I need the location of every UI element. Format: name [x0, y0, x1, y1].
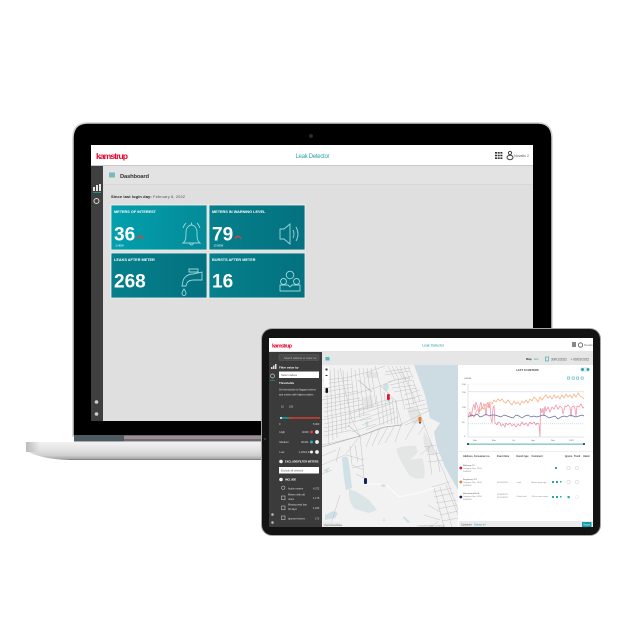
table header: Event type	[516, 455, 529, 458]
include section: 4,372	[313, 488, 320, 490]
table row 3: 11/10/2021	[497, 497, 509, 499]
tablet toolbar	[322, 352, 593, 365]
include section	[279, 478, 320, 520]
card: meters in warning level	[209, 205, 305, 250]
include section: Active meters	[288, 488, 304, 490]
map pin: navy	[364, 478, 367, 484]
map: pale road south	[365, 484, 436, 497]
map pin: red	[387, 394, 390, 402]
table header: Address, Consumer no.	[463, 455, 490, 458]
table row 2: A few days ago	[532, 481, 547, 484]
table row 2: Leak	[516, 482, 522, 484]
tablet body	[261, 328, 601, 536]
level rows: 40/40	[302, 430, 309, 434]
table row 2: Kingsbury 127	[463, 478, 478, 481]
map pin: dark	[326, 388, 328, 393]
map: OpenStreetMap	[324, 523, 343, 527]
table row 1: 1000057	[463, 471, 472, 473]
series: pink	[468, 402, 584, 437]
user name: Novatis	[584, 343, 593, 347]
table footer: Display all	[474, 524, 486, 526]
card: meters of interest: METERS OF INTEREST	[114, 210, 157, 214]
axis labels: Feb	[473, 440, 478, 442]
map attribution	[323, 522, 340, 527]
table row 1: Bathway 70	[463, 464, 475, 467]
icon: speaker	[280, 224, 298, 244]
tablet sidebar: and meters with highest values	[279, 394, 314, 396]
laptop	[26, 123, 552, 460]
app title: Leak Detector	[296, 154, 330, 160]
level rows: Low	[280, 450, 284, 454]
card: meters in warning level: METERS IN WARNING LEVEL	[212, 210, 266, 214]
table row 3: Gurgaon Nor, 1500	[463, 495, 482, 498]
card: meters in warning level: 13 NEW	[214, 244, 224, 248]
icon: grid	[572, 342, 576, 347]
icon: hamburger	[326, 357, 330, 360]
include section: 30 days	[288, 508, 298, 511]
chart title: LAST 10 METERS	[516, 368, 539, 372]
axis labels: Sep	[531, 440, 536, 442]
laptop base	[26, 442, 430, 460]
series: orange	[468, 393, 584, 417]
tablet screen	[269, 338, 593, 528]
panel toggle	[580, 367, 589, 372]
threshold slider: 5,000	[313, 423, 320, 426]
axis labels: 2022	[569, 440, 575, 442]
icon: calendar	[546, 357, 548, 361]
table row 3: 1000043	[463, 499, 472, 501]
icon: user	[578, 343, 583, 347]
icon: dashboard	[93, 184, 101, 191]
level rows: Medium	[280, 440, 289, 444]
tablet sidebar: Set thresholds for flagged meters	[279, 388, 317, 392]
table header	[463, 455, 590, 458]
map/list toggle: Map	[526, 357, 532, 361]
icon: grid menu	[495, 152, 502, 159]
map: parks	[349, 372, 435, 513]
map: sea	[414, 365, 458, 490]
table row 1	[459, 464, 579, 473]
table footer: Customer	[461, 524, 472, 526]
tablet	[261, 328, 601, 536]
user name: Novatis 2	[514, 154, 529, 158]
icon: burst	[280, 271, 300, 291]
search box	[279, 354, 319, 360]
include section: INCLUDE	[285, 478, 296, 482]
card: leaks after meter: 268	[114, 272, 146, 292]
include section: Meters with old	[288, 494, 305, 496]
include section: Missing read last	[288, 504, 307, 506]
include section: 173	[315, 518, 320, 520]
table row 2: 1000032	[463, 485, 472, 487]
range slider	[467, 443, 585, 445]
icon: settings	[271, 513, 274, 516]
table row 3: Marchmont Rd 8	[463, 492, 480, 495]
card: meters of interest	[111, 205, 207, 250]
y axis title: L/H/DM	[464, 378, 471, 380]
icon: hamburger	[109, 172, 115, 178]
axis labels	[462, 384, 575, 442]
table footer	[459, 521, 593, 527]
card: bursts after meter: BURSTS AFTER METER	[212, 258, 256, 262]
threshold slider: 10	[281, 406, 284, 408]
axis labels: 50	[462, 422, 465, 424]
table row 3: Other leak	[516, 495, 527, 498]
map: © OpenStreetMap contributors	[417, 524, 445, 528]
level rows	[280, 430, 319, 454]
sidebar	[91, 166, 103, 421]
table row 3: Old or new meter	[532, 495, 549, 498]
include section: notes	[288, 498, 295, 501]
map: water patches	[323, 383, 410, 523]
icon: location	[94, 198, 99, 204]
axis labels: 150	[462, 392, 466, 394]
threshold slider: 0	[279, 423, 281, 426]
card: meters in warning level: 79	[212, 224, 233, 246]
thresholds text: Thresholds	[279, 381, 295, 385]
card: bursts after meter	[209, 253, 305, 298]
heading: Dashboard	[120, 174, 149, 180]
include section: 1,180	[313, 507, 320, 510]
card: meters of interest: 2 NEW	[116, 244, 124, 248]
series: navy	[468, 414, 584, 419]
map	[322, 365, 458, 528]
app header	[91, 145, 533, 166]
level rows: 1,129/1,611	[298, 450, 313, 454]
table header: Track	[574, 455, 581, 458]
include section: Ignored meters	[288, 518, 306, 520]
axis labels: Jul	[512, 440, 515, 442]
trend arrow	[136, 236, 144, 238]
table header: Ignore	[565, 455, 573, 458]
level rows: High	[280, 430, 285, 434]
icon: dashboard	[271, 364, 276, 369]
exclude section: Exclude all selected	[281, 470, 304, 472]
card: meters of interest: 36	[114, 224, 135, 246]
chart panel	[458, 365, 593, 527]
threshold slider	[279, 406, 320, 426]
laptop lid	[73, 123, 552, 442]
icon: user	[507, 151, 513, 160]
map pin: orange	[418, 417, 421, 424]
card: leaks after meter: LEAKS AFTER METER	[114, 258, 155, 262]
table row 1: Gurgaon Nor, 1500	[463, 467, 482, 470]
line chart	[462, 384, 584, 442]
axis labels: 200	[462, 384, 466, 386]
table footer: Export	[584, 524, 591, 526]
date range: 30/01/2022	[551, 358, 567, 362]
table row 2	[459, 478, 579, 487]
laptop screen	[91, 145, 533, 421]
icon: bell	[183, 222, 200, 245]
table header: Event time	[497, 455, 510, 458]
card: bursts after meter: 16	[212, 272, 233, 292]
tablet sidebar: Select values	[281, 373, 298, 377]
tablet toolbar: > 06/02/2022	[570, 358, 589, 362]
include section: 1,178	[313, 497, 320, 500]
kamstrup logo: kamstrup	[272, 344, 293, 350]
axis labels: 100	[462, 407, 466, 409]
table header: Alarm	[583, 455, 590, 458]
axis labels: Mar	[492, 439, 496, 442]
icon: info	[95, 412, 98, 416]
card: leaks after meter	[111, 253, 207, 298]
last login text: Since last login day: February 8, 2022	[111, 194, 186, 199]
table row 3: 11/09/2021	[497, 494, 509, 496]
chart toolbar	[568, 377, 583, 379]
axis labels: 0	[464, 436, 466, 438]
exclude section	[279, 460, 319, 474]
filter label: Filter value by	[279, 366, 299, 370]
table header: Comment	[532, 455, 543, 458]
select box	[279, 372, 319, 378]
exclude section: EXCLUDE/FILTER METERS	[285, 460, 319, 464]
table row 3	[459, 492, 579, 501]
axis labels: Nov	[551, 440, 556, 442]
icon: settings	[95, 400, 98, 404]
icon: info	[271, 521, 274, 524]
tablet sidebar	[269, 352, 322, 527]
tablet header	[269, 338, 593, 352]
table row 2: 01/09/2021	[497, 482, 509, 484]
tablet toolbar: List	[534, 357, 539, 361]
threshold slider: 100	[289, 406, 294, 408]
table row 2: Gurgaon Nor, 1500	[463, 481, 482, 484]
trend arrow	[234, 236, 242, 238]
level rows: 40/111	[301, 440, 309, 444]
map controls	[324, 367, 329, 387]
dashboard bar	[103, 166, 533, 185]
icon: tap	[182, 269, 202, 296]
map: roads	[322, 366, 458, 527]
tablet sidebar: Search address or meter no.	[284, 356, 317, 360]
kamstrup logo: kamstrup	[96, 151, 128, 161]
app title: Leak Detector	[422, 344, 445, 348]
icon: location	[270, 374, 274, 378]
